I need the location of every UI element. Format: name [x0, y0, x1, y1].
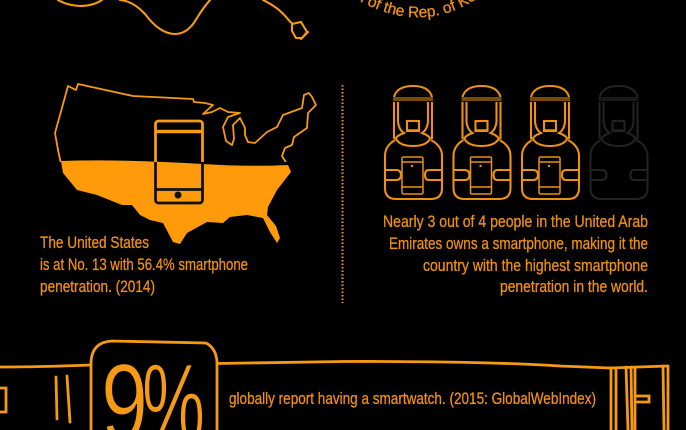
map: United States with phone	[55, 84, 316, 244]
text: United States	[40, 233, 248, 296]
text: smartwatch statistic: globally report having a smartwatch. (2015: GlobalWebIndex)	[229, 389, 596, 408]
icon: smartphone	[155, 121, 203, 203]
text: United Arab Emirates: penetration in the world.	[500, 277, 648, 296]
icons: four people, three with smartphones	[385, 86, 648, 199]
text: United States: penetration. (2014)	[40, 277, 155, 296]
person 3	[522, 86, 579, 199]
map filled portion	[61, 160, 291, 244]
map outline	[55, 84, 316, 164]
person 1	[385, 86, 442, 199]
text: United States: is at No. 13 with 56.4% smartphone	[40, 255, 248, 274]
icon: smartwatch band	[0, 341, 668, 430]
person 4 greyed out	[590, 86, 648, 199]
person 2	[454, 86, 510, 199]
text: United Arab Emirates	[383, 212, 648, 296]
big stat: 9%	[101, 342, 205, 430]
icon: charging cable	[58, 0, 308, 39]
dotted divider	[342, 85, 344, 303]
text: United States: The United States	[40, 233, 149, 252]
